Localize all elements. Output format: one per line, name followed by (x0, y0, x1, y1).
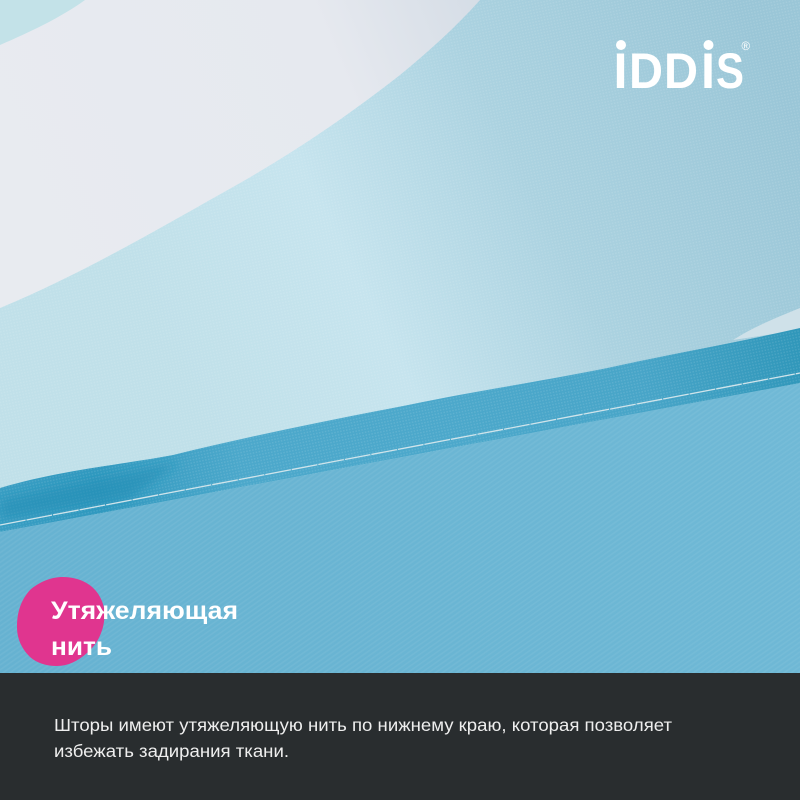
background: sheer curtain fabric (0, 0, 800, 560)
hem with weighted thread (0, 328, 800, 532)
logo: IDDIS: S (716, 43, 744, 99)
heading: Утяжеляющая (51, 597, 238, 625)
logo: IDDIS: I (614, 43, 628, 99)
white sliver at right edge (733, 308, 800, 340)
logo: IDDIS: I (701, 43, 715, 99)
logo: IDDIS: D (664, 43, 698, 99)
logo: IDDIS (614, 40, 750, 99)
logo: IDDIS: D (629, 43, 663, 99)
heading: нить (51, 633, 112, 661)
logo dot left (616, 40, 626, 50)
hem shadow fold (0, 462, 180, 520)
pale blue corner shape (0, 0, 85, 45)
heading (51, 597, 238, 661)
white wave band (0, 0, 480, 308)
pink blob accent (17, 577, 105, 666)
registered mark: ® (742, 41, 750, 53)
logo dot right (704, 40, 714, 50)
description text: избежать задирания ткани. (54, 741, 289, 761)
description text (54, 715, 672, 761)
stitching line (0, 373, 800, 525)
bottom dark panel (0, 673, 800, 800)
lower opaque fabric panel (0, 383, 800, 680)
description text: Шторы имеют утяжеляющую нить по нижнему краю, которая позволяет (54, 715, 672, 735)
